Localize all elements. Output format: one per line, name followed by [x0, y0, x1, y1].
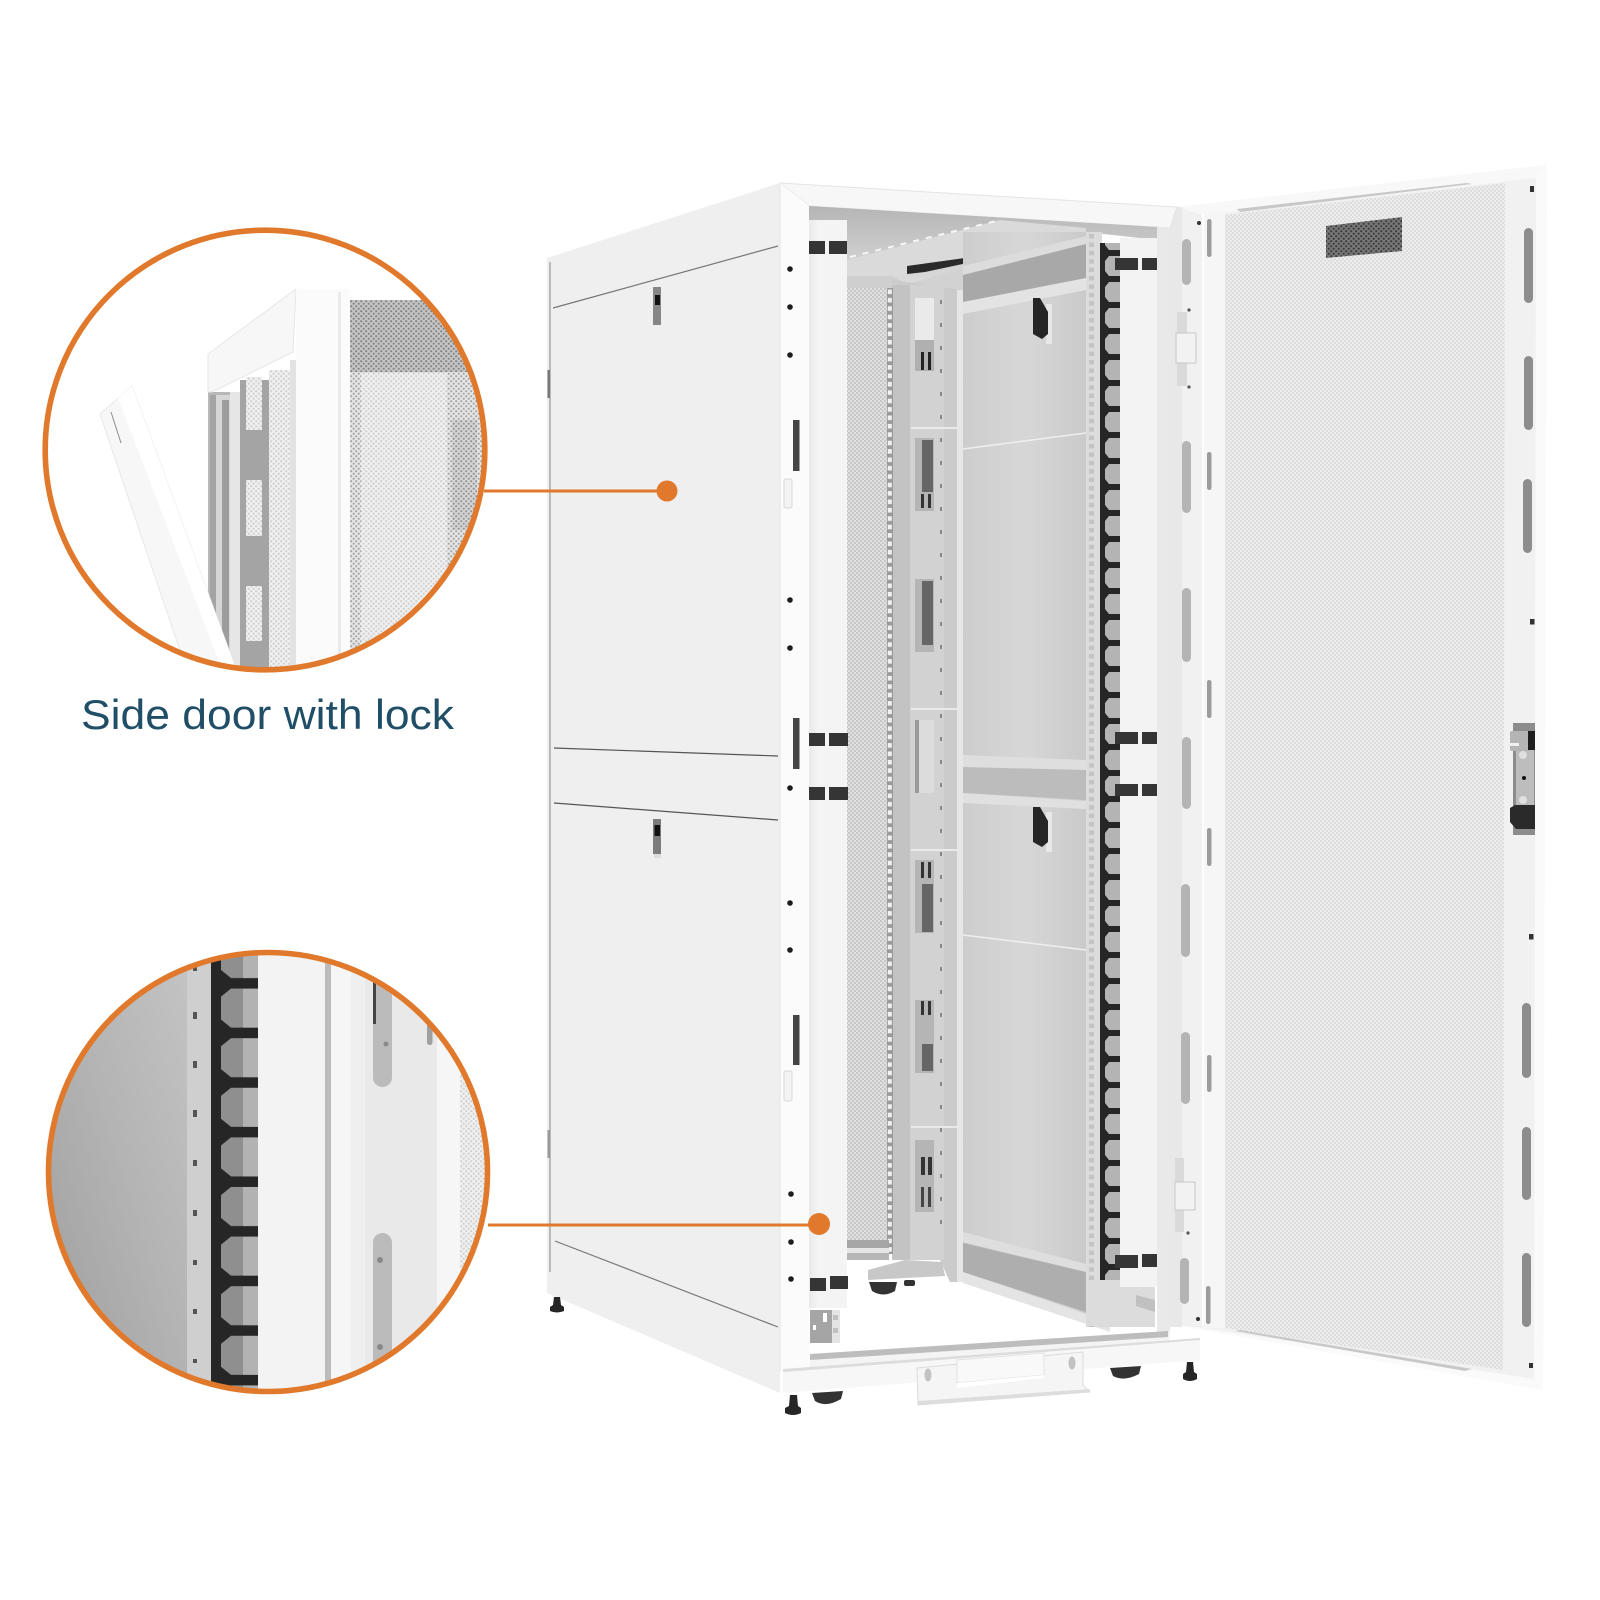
rear panel latch lower	[1033, 807, 1052, 852]
levelling feet	[550, 1297, 1197, 1415]
open front door	[1162, 165, 1547, 1390]
small door slot close-up	[427, 1025, 432, 1045]
upper door slot close-up	[373, 982, 392, 1087]
server cabinet	[547, 165, 1547, 1415]
bottom mesh pocket	[1235, 1330, 1472, 1371]
rack strip close-up	[187, 945, 211, 1401]
plinth and floor rail	[783, 1331, 1200, 1393]
rear casters	[869, 1280, 915, 1294]
side door lock lower	[653, 819, 661, 858]
frame hinge plates	[784, 479, 792, 1101]
door lock	[1503, 723, 1535, 835]
door fixing squares	[1162, 186, 1534, 1368]
door left small slots	[1206, 219, 1212, 1324]
bracket plate 6	[915, 1000, 934, 1073]
callout leader line: side door	[484, 490, 667, 492]
callout leader line: cable manager	[488, 1224, 819, 1226]
detail circle: cable manager	[40, 945, 496, 1413]
left cable duct	[809, 220, 848, 1308]
cable manager close-up	[211, 945, 258, 1401]
rear panel close-up	[51, 971, 187, 1373]
open side door close-up	[100, 386, 240, 680]
frame slots	[793, 420, 800, 1065]
top frame close-up	[208, 289, 296, 392]
left mounting column	[887, 280, 963, 1282]
right front post	[1157, 227, 1170, 1336]
lower left bracket	[810, 1310, 840, 1343]
door right slots	[1522, 228, 1533, 1327]
bracket plate 2	[915, 438, 934, 511]
cabinet interior close-up	[208, 360, 298, 682]
right cable duct	[1115, 238, 1159, 1287]
bracket plate 3	[915, 579, 934, 652]
rear panel latch upper	[1033, 298, 1052, 344]
duct straps	[809, 241, 848, 1291]
rear panel	[963, 232, 1110, 1332]
bracket plate 1	[915, 298, 934, 371]
callout dot: side door	[656, 480, 678, 502]
side door lock upper	[653, 287, 661, 325]
ground bracket	[917, 1352, 1090, 1405]
bottom hinge	[1175, 1158, 1195, 1235]
white post close-up	[296, 289, 298, 665]
frame holes	[787, 266, 794, 1282]
perforated door close-up	[350, 300, 482, 650]
bracket plate 7	[915, 1140, 934, 1212]
top hinge	[1176, 308, 1196, 389]
infographic canvas	[42, 169, 1544, 1415]
right vertical post	[1086, 232, 1155, 1327]
left front frame post	[780, 183, 809, 1372]
door mesh panel	[1225, 183, 1505, 1370]
door left large slots	[1180, 239, 1191, 1304]
top mesh pocket	[1237, 183, 1472, 212]
detail circle: side door with lock	[40, 225, 490, 682]
lower door slot close-up	[373, 1233, 392, 1362]
door vent	[1326, 217, 1402, 258]
ceiling	[809, 206, 1158, 296]
lower rear rails and base bracket	[847, 1240, 945, 1280]
shelf lines	[911, 428, 958, 1127]
front casters	[812, 1366, 1141, 1404]
bracket plate 5	[915, 860, 934, 933]
caption: Side door with lock	[81, 691, 455, 738]
frame header	[780, 183, 1177, 228]
bracket plate 4	[915, 720, 934, 793]
white duct close-up	[258, 945, 496, 1401]
duct straps	[1115, 258, 1159, 1268]
rear perforated door	[847, 288, 887, 1240]
cable manager	[1100, 243, 1120, 1280]
callout dot: cable manager	[808, 1213, 830, 1235]
side panel	[547, 183, 780, 1393]
